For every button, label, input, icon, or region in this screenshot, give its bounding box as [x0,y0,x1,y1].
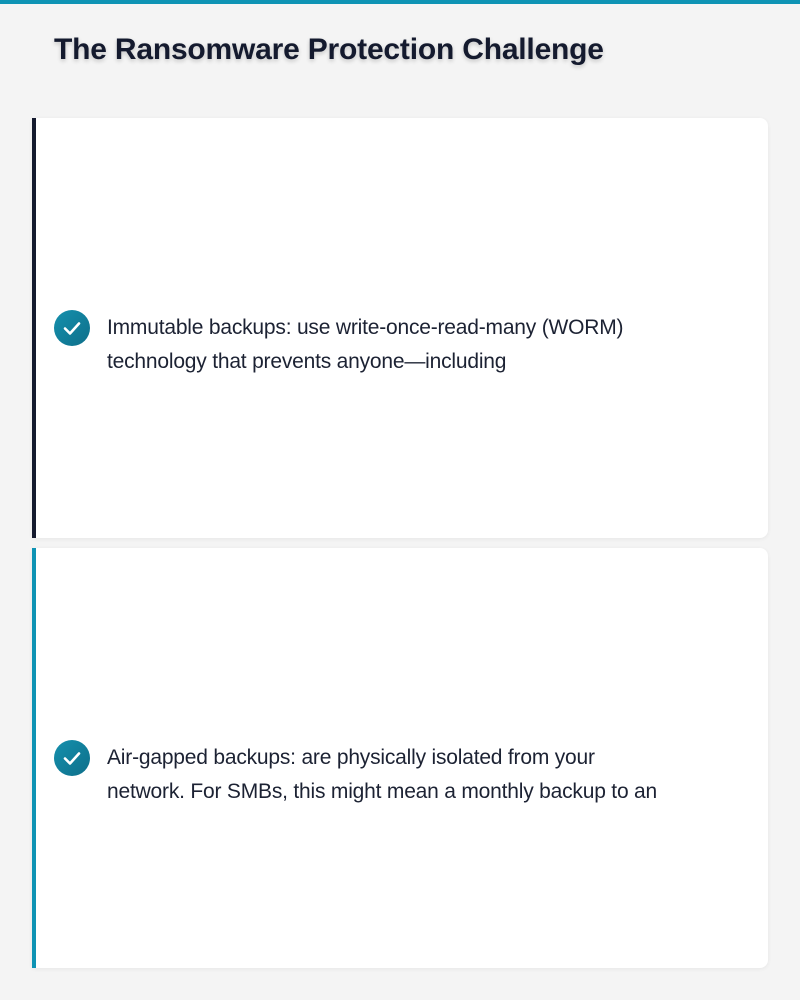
item: immutable backups text: Immutable backups: use write-once-read-many (WORM) technology that prevents anyone—including [107,316,623,373]
panel: immutable backups [32,118,768,538]
icon: check [54,740,90,776]
panel: air-gapped backups [32,548,768,968]
icon: check [54,310,90,346]
item: air-gapped text: Air-gapped backups: are physically isolated from your network. For SMBs, this might mean a monthly backup to an [107,746,657,803]
title: The Ransomware Protection Challenge [54,33,604,66]
